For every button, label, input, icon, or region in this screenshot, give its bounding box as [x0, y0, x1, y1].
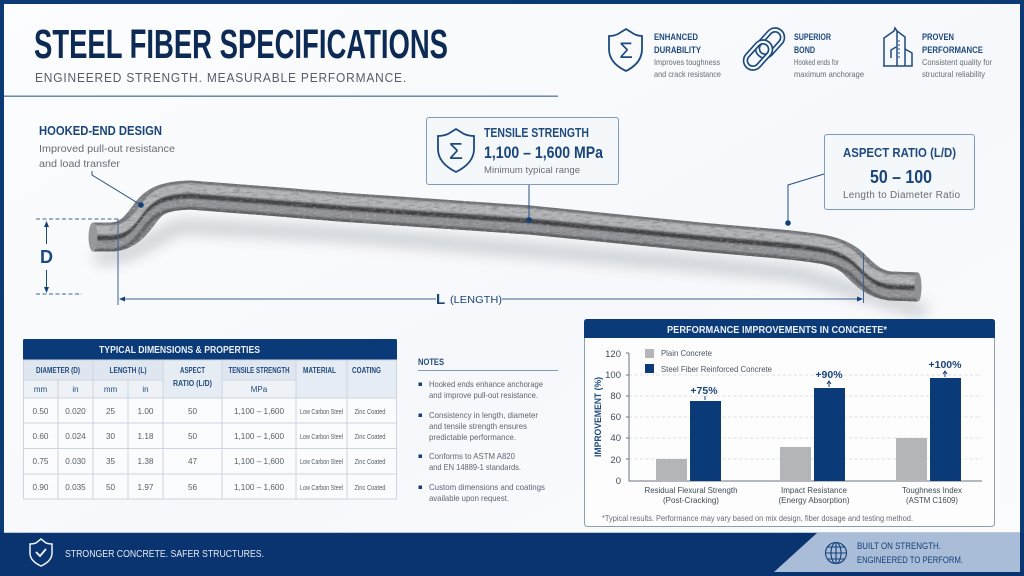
table column headers: RATIO (L/D): [173, 379, 212, 388]
table rows: 1.97: [138, 483, 154, 492]
icon: globe: [826, 542, 846, 564]
table rows: 1,100 – 1,600: [234, 457, 284, 466]
table rows: 47: [188, 457, 197, 466]
table column headers: [34, 366, 381, 394]
table rows: 1.18: [138, 432, 154, 441]
table rows: 0.75: [33, 457, 49, 466]
callout: aspect ratio: Length to Diameter Ratio: [843, 190, 960, 201]
callout: aspect ratio: ASPECT RATIO (L/D): [843, 145, 956, 160]
benefit: proven performance: Consistent quality for: [922, 57, 992, 67]
legend: [645, 348, 772, 374]
icon: building: [883, 28, 912, 66]
table column headers: MPa: [251, 385, 268, 394]
table rows: [33, 407, 386, 492]
panel: notes: [418, 357, 558, 503]
table rows: Zinc Coated: [354, 483, 386, 492]
table rows: 50: [106, 483, 115, 492]
icon: sigma shield: Σ: [619, 38, 633, 63]
callout: tensile strength: [426, 118, 618, 223]
bars: impact resistance: +90%: [815, 369, 843, 381]
steel fiber illustration: [88, 182, 925, 312]
chart heading bar: PERFORMANCE IMPROVEMENTS IN CONCRETE*: [667, 324, 888, 336]
callout: aspect ratio: 50 – 100: [870, 166, 932, 187]
dimension: length L: (LENGTH): [450, 294, 502, 306]
callout: tensile strength: Minimum typical range: [484, 165, 580, 176]
note text: and tensile strength ensures: [429, 421, 527, 431]
note text: Conforms to ASTM A820: [429, 451, 515, 461]
header: title block: [34, 21, 448, 85]
note text: Custom dimensions and coatings: [429, 482, 545, 492]
category labels: (ASTM C1609): [906, 495, 958, 505]
footer tagline: STRONGER CONCRETE. SAFER STRUCTURES.: [65, 548, 264, 560]
table rows: 0.50: [33, 407, 49, 416]
panel: dimensions table: [23, 339, 397, 499]
table rows: 1.00: [138, 407, 154, 416]
callout: tensile strength: 1,100 – 1,600 MPa: [484, 144, 604, 162]
note text: [429, 379, 545, 503]
table rows: 56: [188, 483, 197, 492]
note bullets: [418, 382, 422, 489]
bars: toughness index: [896, 359, 962, 481]
table rows: 30: [106, 432, 115, 441]
footer band: [0, 532, 1024, 576]
table rows: 50: [188, 407, 197, 416]
table rows: 1,100 – 1,600: [234, 407, 284, 416]
table rows: Zinc Coated: [354, 457, 386, 466]
icon: sigma shield: [438, 129, 474, 172]
category labels: (Energy Absorption): [778, 495, 850, 505]
y-axis labels: 0: [616, 476, 621, 487]
table column headers: in: [72, 385, 79, 394]
note text: and improve pull-out resistance.: [429, 390, 538, 400]
table rows: 0.60: [33, 432, 49, 441]
icon: chain link: [742, 27, 786, 71]
note text: available upon request.: [429, 493, 509, 503]
benefit: enhanced durability: [609, 29, 721, 79]
callout: tensile strength: TENSILE STRENGTH: [484, 126, 589, 140]
benefit: superior bond: maximum anchorage: [794, 69, 864, 79]
table rows: 1,100 – 1,600: [234, 432, 284, 441]
table rows: 0.024: [65, 432, 86, 441]
table rows: Low Carbon Steel: [300, 432, 343, 441]
benefit: enhanced durability: and crack resistance: [654, 69, 721, 79]
bars: toughness index: +100%: [928, 359, 962, 371]
note text: Hooked ends enhance anchorage: [429, 379, 543, 389]
table heading bar: TYPICAL DIMENSIONS & PROPERTIES: [99, 344, 260, 356]
note text: and EN 14889-1 standards.: [429, 462, 521, 472]
chart heading bar: [584, 319, 995, 338]
note text: Consistency in length, diameter: [429, 410, 538, 420]
table rows: Zinc Coated: [354, 407, 386, 416]
y-axis labels: 40: [610, 433, 621, 444]
table rows: 50: [188, 432, 197, 441]
category labels: Toughness Index: [902, 485, 963, 495]
benefit: proven performance: PERFORMANCE: [922, 45, 983, 56]
callout: hooked-end design: and load transfer: [39, 158, 121, 170]
note text: predictable performance.: [429, 432, 516, 442]
y-axis labels: 120: [605, 349, 621, 360]
dimension: length L: L: [436, 291, 445, 308]
benefit: enhanced durability: Improves toughness: [654, 57, 720, 67]
callout: hooked-end design: [39, 124, 175, 208]
dimension: diameter D: [36, 219, 118, 294]
table column headers: DIAMETER (D): [36, 366, 80, 375]
y-axis labels: 20: [610, 455, 621, 466]
table column headers: COATING: [352, 366, 381, 375]
benefit: superior bond: Hooked ends for: [794, 57, 839, 67]
table column headers: mm: [104, 385, 118, 394]
icon: check shield: [30, 539, 52, 566]
y-axis labels: 60: [610, 412, 621, 423]
benefit: enhanced durability: DURABILITY: [654, 45, 702, 56]
table rows: 35: [106, 457, 115, 466]
bars: residual flexural strength: [656, 385, 721, 481]
legend: Plain Concrete: [661, 348, 712, 358]
callout: hooked-end design: HOOKED-END DESIGN: [39, 124, 162, 138]
bars: residual flexural strength: +75%: [690, 385, 718, 397]
benefit: superior bond: [742, 27, 864, 79]
table rows: 0.020: [65, 407, 86, 416]
dimension: diameter D: D: [40, 247, 53, 267]
callout: hooked-end design: Improved pull-out resistance: [39, 143, 175, 155]
table heading bar: [23, 339, 397, 360]
benefit: proven performance: structural reliability: [922, 69, 986, 79]
y-axis labels: 80: [610, 391, 621, 402]
table rows: 0.030: [65, 457, 86, 466]
title: STEEL FIBER SPECIFICATIONS: [34, 21, 448, 67]
subtitle: ENGINEERED STRENGTH. MEASURABLE PERFORMANCE.: [35, 70, 407, 85]
dimension: length L: [118, 219, 864, 308]
table column headers: in: [142, 385, 149, 394]
benefit: proven performance: [883, 28, 992, 79]
category labels: Impact Resistance: [781, 485, 847, 495]
y-axis title: IMPROVEMENT (%): [593, 377, 604, 457]
table rows: 1,100 – 1,600: [234, 483, 284, 492]
callout: aspect ratio: [785, 134, 974, 226]
table rows: 0.90: [33, 483, 49, 492]
panel: notes: NOTES: [418, 357, 444, 368]
bars: impact resistance: [780, 369, 845, 481]
table rows: Low Carbon Steel: [300, 483, 343, 492]
category labels: Residual Flexural Strength: [644, 485, 738, 495]
table column headers: TENSILE STRENGTH: [228, 366, 290, 375]
benefit: superior bond: SUPERIOR: [794, 32, 831, 43]
table rows: 1.38: [138, 457, 154, 466]
table rows: 25: [106, 407, 115, 416]
table column headers: mm: [34, 385, 48, 394]
icon: sigma shield: Σ: [449, 138, 463, 164]
footer slogan: ENGINEERED TO PERFORM.: [857, 555, 963, 565]
footer slanted panel: [774, 533, 1020, 572]
footer slogan: [857, 541, 963, 565]
table rows: Zinc Coated: [354, 432, 386, 441]
y-axis labels: [605, 349, 621, 487]
chart footnote: *Typical results. Performance may vary based on mix design, fiber dosage and testing method.: [602, 514, 913, 523]
benefit: enhanced durability: ENHANCED: [654, 32, 698, 43]
category labels: (Post-Cracking): [663, 495, 719, 505]
table rows: 0.035: [65, 483, 86, 492]
benefit: proven performance: PROVEN: [922, 32, 954, 43]
table column headers: LENGTH (L): [110, 366, 147, 375]
table rows: Low Carbon Steel: [300, 407, 343, 416]
table rows: Low Carbon Steel: [300, 457, 343, 466]
y-axis labels: 100: [605, 370, 621, 381]
category labels: [644, 485, 963, 505]
benefit: superior bond: BOND: [794, 45, 815, 56]
panel: performance chart: [584, 319, 995, 526]
table column headers: MATERIAL: [303, 366, 336, 375]
footer slogan: BUILT ON STRENGTH.: [857, 541, 941, 551]
legend: Steel Fiber Reinforced Concrete: [661, 364, 772, 374]
table column headers: ASPECT: [180, 366, 205, 375]
